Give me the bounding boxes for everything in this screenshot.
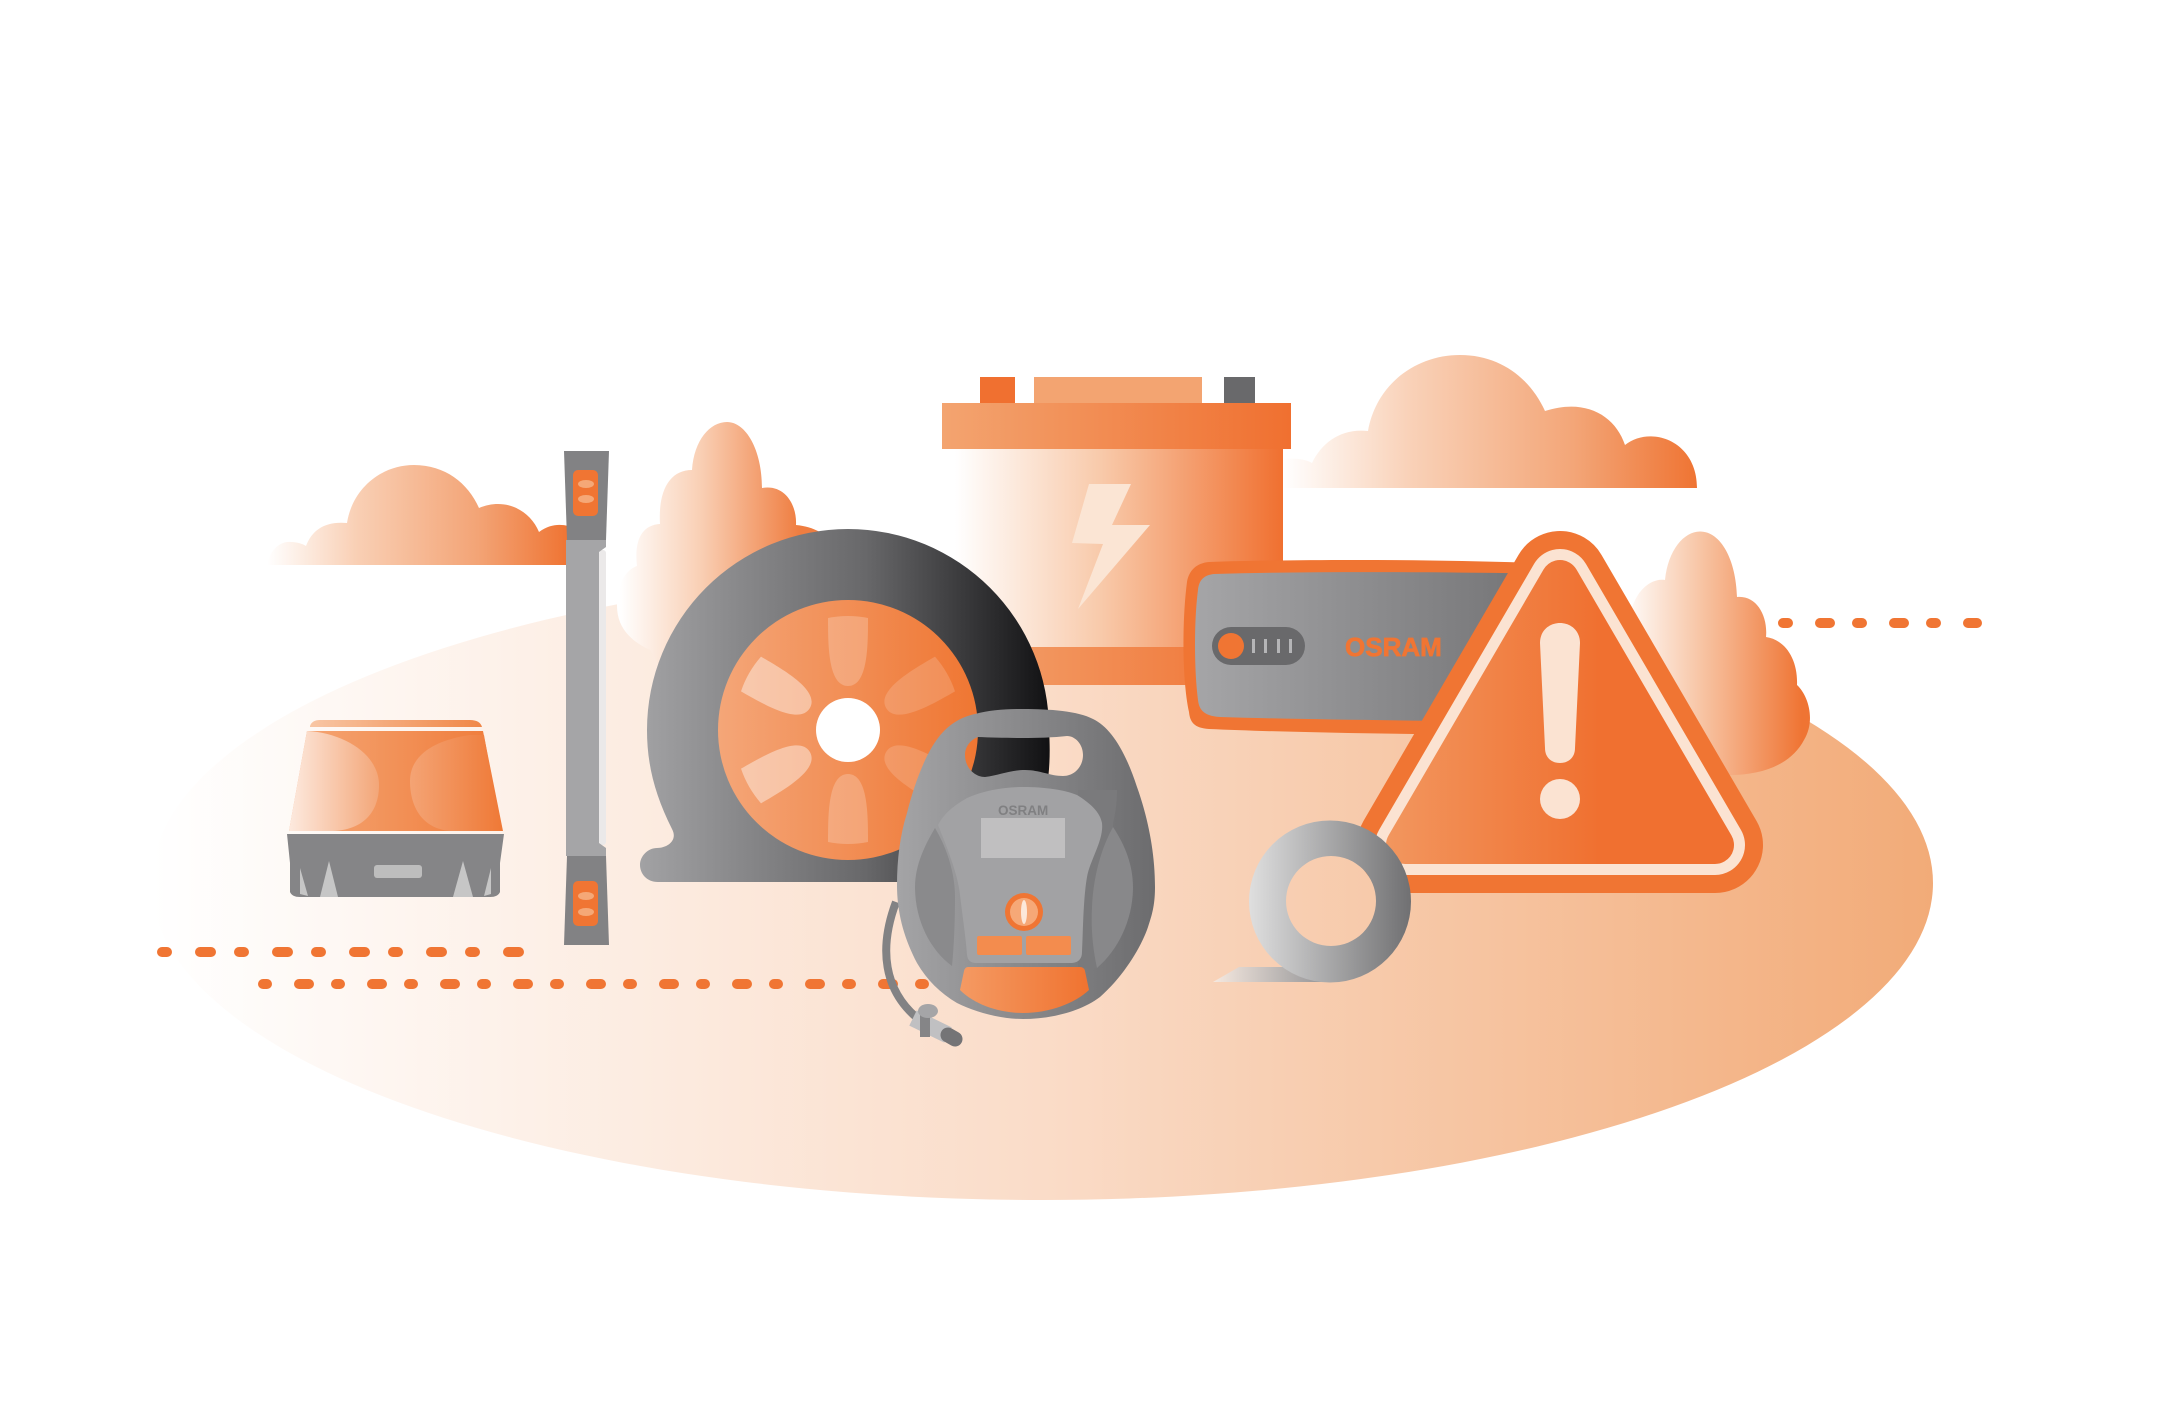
beacon left lens [289,731,379,831]
air compressor [886,709,1155,1039]
triangle cream line [1405,579,1715,845]
compressor centre panel [938,787,1102,963]
flashlight bar [564,451,609,945]
flashlight shaft bottom collar [566,843,606,856]
compressor left panel [915,828,955,966]
beacon dome [289,731,503,831]
battery lower strip [945,647,1283,685]
bush: middle [617,422,840,700]
flashlight shaft [566,540,599,856]
amber beacon [287,720,504,897]
beacon base [287,834,504,897]
flashlight light strip [599,550,606,845]
cloud: left [267,465,568,565]
flashlight bottom handle [564,856,609,945]
beacon switch [374,865,422,878]
compressor button: left [977,936,1022,955]
flashlight top button [573,470,598,516]
OSRAM logo: OSRAM [1345,632,1442,662]
ground ellipse [151,566,1933,1200]
compressor hose [886,902,916,1017]
wheel rim [718,600,978,860]
exclamation bar [1540,623,1580,763]
compressor right panel [1092,827,1133,968]
battery lid [942,403,1291,449]
beacon cap [310,720,482,727]
flashlight top lights [578,480,594,488]
dotted line: lower left top [162,947,519,957]
compressor right band [1078,790,1117,968]
bush: right [1626,532,1810,775]
compressor body [897,709,1155,1019]
triangle inner [1405,579,1715,845]
compressor orange foot [960,967,1089,1013]
dotted line: right [1783,618,1977,628]
triangle outer border [1405,579,1715,845]
wheel spokes [739,616,957,844]
jump starter [1183,560,1560,735]
beacon right lens [410,735,501,831]
flashlight bottom lights [578,892,594,900]
battery cap [1034,377,1202,404]
jump starter face [1195,572,1560,722]
tape tail [1213,967,1325,982]
indicator pill [1212,627,1305,665]
warning triangle [1405,579,1715,845]
compressor logo: OSRAM [998,803,1048,818]
compressor button: right [1026,936,1071,955]
jump starter casing [1183,560,1560,735]
flashlight bottom button [573,881,598,926]
flashlight top handle [564,451,609,540]
battery terminal: positive [980,377,1015,404]
tire outer [640,529,1050,882]
flashlight shaft top collar [566,540,606,552]
compressor nozzle [913,1004,955,1039]
tape ring [1249,820,1411,982]
tire [640,529,1050,882]
cloud: right [1283,355,1697,488]
tape roll [1213,820,1411,982]
battery terminal: negative [1224,377,1255,404]
battery body [945,449,1283,647]
battery [942,377,1291,685]
dotted line: lower left bottom [263,979,924,989]
beacon highlights [300,861,491,897]
compressor screen [981,818,1065,858]
icon: lightning bolt [1072,484,1150,609]
wheel hub [816,698,880,762]
compressor dial [1005,893,1043,931]
exclamation dot [1540,779,1580,819]
